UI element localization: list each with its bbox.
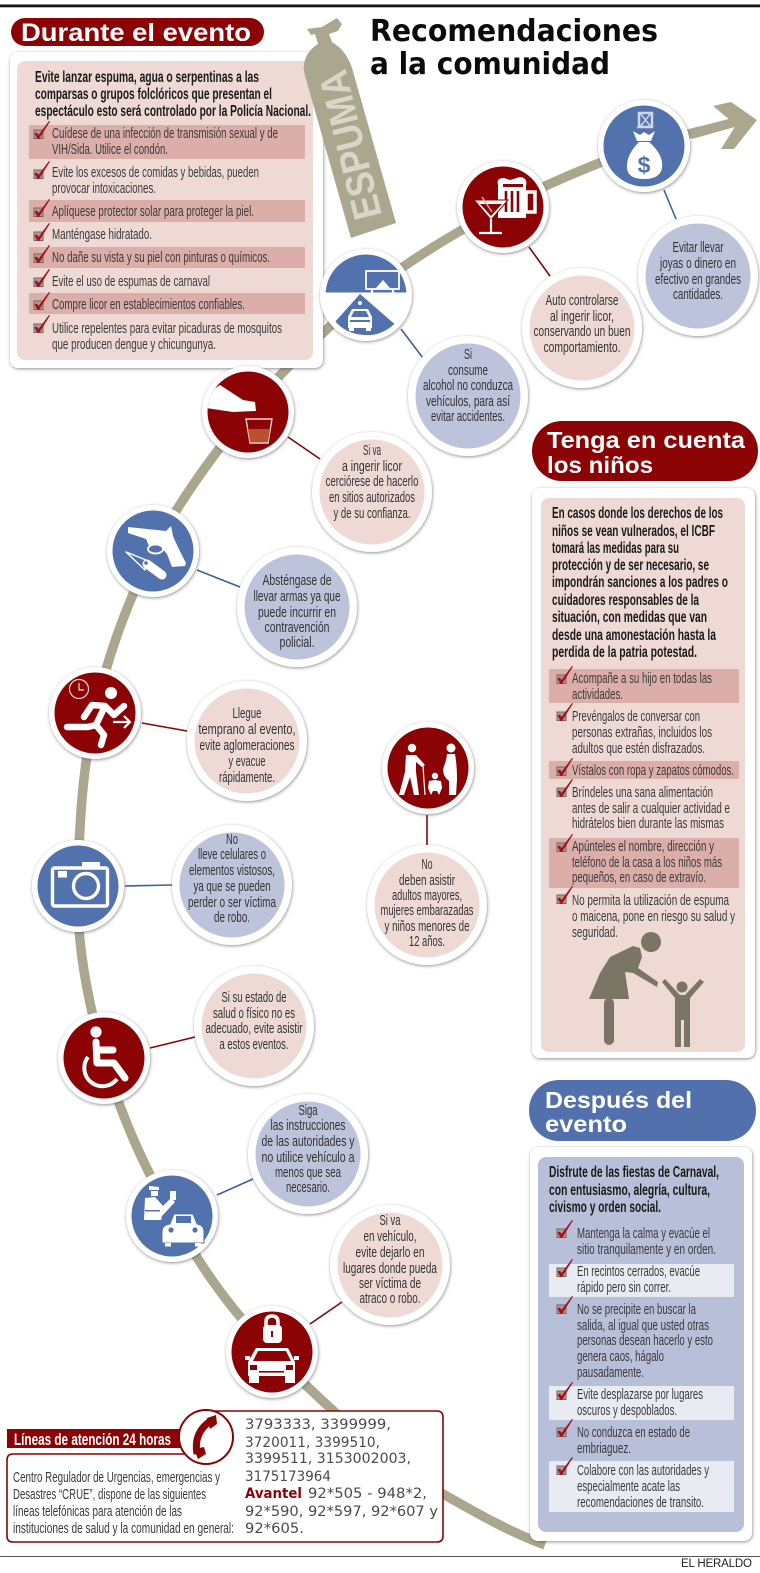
panel: durante el evento: Utilice repelentes para evitar picaduras de mosquitos (52, 320, 282, 337)
callout: auto controlarse: comportamiento. (544, 339, 620, 356)
panel: durante el evento: espectáculo esto será controlado por la Policía Nacional. (35, 103, 311, 120)
callout: auto controlarse: Auto controlarse (546, 292, 618, 309)
callout: celulares: perder o ser víctima (188, 894, 276, 911)
callout: vehículo: evite dejarlo en (356, 1244, 424, 1261)
panel: líneas de atención: 3175173964 (245, 1469, 331, 1485)
top rule (0, 4, 760, 7)
icon: revolver and knife (107, 505, 199, 597)
panel: durante el evento: Evite el uso de espumas de carnaval (52, 273, 210, 290)
panel: durante el evento: Evite lanzar espuma, agua o serpentinas a las (35, 69, 259, 86)
icon: wheelchair (58, 1012, 150, 1104)
callout: instrucciones: las instrucciones (270, 1117, 346, 1134)
heading: Después del evento (529, 1080, 756, 1141)
heading: Tenga en cuenta los niños: Tenga en cuenta (547, 427, 745, 453)
icon: road signs and car (320, 249, 412, 341)
panel: líneas de atención: 92*605. (245, 1521, 304, 1537)
icon: money bag (598, 100, 690, 192)
callout: armas: contravención (264, 619, 330, 636)
title: Recomendaciones (370, 14, 658, 49)
callout: vehículo: lugares donde pueda (343, 1260, 437, 1277)
panel: líneas de atención: instituciones de salud y la comunidad en general: (13, 1520, 234, 1537)
icon: padlock and car (226, 1306, 318, 1398)
panel: después del evento (530, 1147, 752, 1541)
callout: celulares: elementos vistosos, (189, 862, 275, 879)
bottom rule (0, 1556, 760, 1557)
panel: después del evento: genera caos, hágalo (577, 1348, 664, 1365)
panel: durante el evento: que producen dengue y chicungunya. (52, 336, 216, 353)
callout: licor: Si va (363, 442, 381, 459)
callout: joyas (638, 216, 758, 336)
panel: después del evento: especialmente acate las (577, 1478, 680, 1495)
callout: vehículo: ser víctima de (359, 1275, 421, 1292)
icon: money bag: $ (638, 152, 651, 178)
panel: después del evento: No conduzca en estado de (577, 1424, 690, 1441)
panel: tenga en cuenta los niños: tomará las medidas para su (552, 540, 679, 557)
panel: durante el evento: Cuídese de una infección de transmisión sexual y de (52, 125, 278, 142)
panel: durante el evento: provocar intoxicaciones. (52, 180, 156, 197)
callout: armas: llevar armas ya que (254, 588, 340, 605)
panel: líneas de atención (7, 1410, 443, 1542)
connector lines (125, 190, 676, 1324)
callout: llegue temprano: rápidamente. (219, 769, 275, 786)
panel: después del evento: pausadamente. (577, 1364, 644, 1381)
panel: después del evento: rápido pero sin correr. (577, 1279, 671, 1296)
callout: joyas: cantidades. (673, 286, 723, 303)
icon: beer and cocktail (457, 161, 549, 253)
callout: instrucciones (248, 1094, 368, 1214)
panel: durante el evento: Aplíquese protector solar para proteger la piel. (52, 203, 254, 220)
callout: armas: Absténgase de (262, 572, 332, 589)
callout: licor: y de su confianza. (334, 505, 410, 522)
panel: líneas de atención: 3399511, 3153002003, (245, 1451, 411, 1467)
panel: después del evento: No se precipite en buscar la (577, 1301, 696, 1318)
callout: armas: policial. (280, 634, 314, 651)
callout: vehículo (330, 1205, 450, 1325)
title (370, 14, 658, 82)
panel: líneas de atención: Desastres “CRUE”, dispone de las siguientes (13, 1486, 206, 1503)
callout: celulares: ya que se pueden (194, 878, 270, 895)
callout: no deben asistir: mujeres embarazadas (380, 902, 474, 919)
callout: llegue temprano: evite aglomeraciones (200, 737, 294, 754)
callout: joyas: Evitar llevar (672, 239, 724, 256)
callout: celulares: de robo. (214, 909, 250, 926)
callout: llegue temprano (187, 681, 307, 801)
panel: líneas de atención: Centro Regulador de Urgencias, emergencias y (13, 1469, 220, 1486)
callout: estado de salud: salud o físico no es (213, 1005, 295, 1022)
callout: vehículo: en vehículo, (364, 1228, 416, 1245)
callout: estado de salud: Si su estado de (222, 989, 286, 1006)
callout: licor: a ingerir licor (342, 458, 402, 475)
callout: instrucciones: de las autoridades y (262, 1133, 355, 1150)
panel: tenga en cuenta los niños (532, 488, 755, 1058)
icon: adult with child (589, 932, 704, 1047)
callout: instrucciones: menos que sea (275, 1164, 341, 1181)
callout: vehículo: atraco o robo. (360, 1290, 420, 1307)
heading: Después del evento: Después del (545, 1087, 692, 1113)
callout: llegue temprano: Llegue (232, 705, 262, 722)
panel: líneas de atención: 92*505 - 948*2, (308, 1486, 427, 1502)
title: a la comunidad (370, 47, 610, 82)
callout: no deben asistir: 12 años. (409, 933, 445, 950)
panel: líneas de atención: 92*590, 92*597, 92*607 y (245, 1504, 438, 1520)
panel: durante el evento: VIH/Sida. Utilice el condón. (52, 141, 168, 158)
callout: celulares (172, 825, 292, 945)
panel: después del evento: civismo y orden social. (549, 1199, 661, 1216)
icon: bottle and glass (202, 366, 294, 458)
panel: después del evento: oscuros y despoblados. (577, 1402, 677, 1419)
callout: instrucciones: no utilice vehículo a (262, 1149, 355, 1166)
heading: Tenga en cuenta los niños (532, 421, 758, 481)
icon: running person and clock (49, 667, 141, 759)
callout: armas (237, 547, 357, 667)
callout: estado de salud (194, 966, 314, 1086)
callout: no deben asistir: adultos mayores, (392, 887, 462, 904)
credit: EL HERALDO (681, 1558, 752, 1570)
heading: Durante el evento: Durante el evento (21, 19, 251, 47)
panel: durante el evento (10, 52, 323, 368)
icon: elderly, pregnant woman and baby (382, 722, 474, 814)
callout: alcohol y conducir: alcohol no conduzca (423, 377, 513, 394)
callout: no deben asistir (367, 845, 487, 965)
heading: Después del evento: evento (545, 1111, 627, 1137)
callout: celulares: No (226, 831, 238, 848)
panel: líneas de atención: líneas telefónicas para atención de las (13, 1503, 182, 1520)
callout: licor: en sitios autorizados (329, 489, 415, 506)
panel: líneas de atención: Avantel (245, 1486, 302, 1502)
callout: armas: puede incurrir en (258, 604, 336, 621)
callout: celulares: lleve celulares o (198, 846, 266, 863)
panel: líneas de atención: 3720011, 3399510, (245, 1435, 380, 1451)
callout: alcohol y conducir: vehículos, para así (426, 393, 511, 410)
panel: líneas de atención: 3793333, 3399999, (245, 1417, 391, 1433)
panel: durante el evento: No dañe su vista y su piel con pinturas o químicos. (52, 249, 270, 266)
callout: estado de salud: a estos eventos. (220, 1036, 288, 1053)
callout: instrucciones: Siga (298, 1102, 318, 1119)
heading: Tenga en cuenta los niños: los niños (547, 452, 653, 478)
panel: durante el evento: comparsas o grupos folclóricos que presentan el (35, 86, 272, 103)
panel: tenga en cuenta los niños: seguridad. (572, 924, 618, 941)
panel: líneas de atención: Líneas de atención 24 horas (14, 1431, 171, 1449)
callout: alcohol y conducir: consume (448, 362, 488, 379)
callout: llegue temprano: y evacue (228, 753, 266, 770)
panel: durante el evento: Evite los excesos de comidas y bebidas, pueden (52, 164, 259, 181)
callout: auto controlarse: al ingerir licor, (550, 308, 614, 325)
panel: después del evento: embriaguez. (577, 1440, 631, 1457)
callout: alcohol y conducir: Si (464, 346, 472, 363)
callout: no deben asistir: y niños menores de (384, 918, 470, 935)
icon: espuma cylinder: ESPUMA (311, 66, 391, 224)
callout: licor: cerciórese de hacerlo (326, 473, 418, 490)
panel: durante el evento: Compre licor en establecimientos confiables. (52, 296, 245, 313)
callout: alcohol y conducir: evitar accidentes. (431, 408, 505, 425)
panel: tenga en cuenta los niños: actividades. (572, 686, 623, 703)
callout: no deben asistir: No (422, 856, 432, 873)
callout: llegue temprano: temprano al evento, (198, 721, 296, 738)
callout: alcohol y conducir (408, 336, 528, 456)
callout: licor (312, 432, 432, 552)
icon: police and car (126, 1170, 218, 1262)
icon: camera (32, 840, 124, 932)
callout: vehículo: Si va (380, 1212, 401, 1229)
callout: no deben asistir: deben asistir (399, 872, 455, 889)
icon: telephone (179, 1410, 233, 1464)
callout: auto controlarse (522, 268, 642, 388)
callout: estado de salud: adecuado, evite asistir (206, 1020, 302, 1037)
callout: auto controlarse: conservando un buen (534, 323, 630, 340)
callout: instrucciones: necesario. (286, 1179, 330, 1196)
panel: durante el evento: Manténgase hidratado. (52, 226, 152, 243)
